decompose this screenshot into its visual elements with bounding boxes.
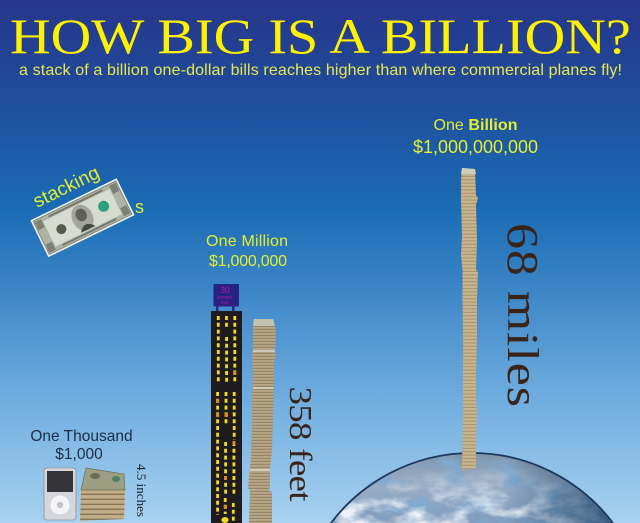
label: one billion: One Billion xyxy=(434,117,518,134)
building sign xyxy=(214,284,239,312)
label: one million: One Million xyxy=(206,233,288,250)
building sign: INN xyxy=(221,300,229,305)
icon: small cash stack xyxy=(80,468,125,521)
label: one million xyxy=(206,233,288,270)
label: one billion: $1,000,000,000 xyxy=(413,137,538,157)
heading: stacking dollar bills xyxy=(30,162,144,257)
label: 358 feet: 358 feet xyxy=(283,386,317,502)
building sign: 30 xyxy=(221,286,230,295)
label: one thousand xyxy=(30,428,133,463)
label: 68 miles: 68 miles xyxy=(498,223,546,407)
label: one thousand: One Thousand xyxy=(30,428,133,445)
icon: one-dollar bill xyxy=(30,178,135,257)
subtitle: a stack of a billion one-dollar bills reaches higher than where commercial planes fly! xyxy=(19,62,622,79)
icon: earth globe xyxy=(331,453,613,523)
label: one billion xyxy=(413,117,538,157)
icon: 30 story inn building xyxy=(211,284,242,523)
label: 4.5 inches: 4.5 inches xyxy=(134,464,149,517)
label: one thousand: $1,000 xyxy=(55,446,103,463)
icon: million-dollar cash stack xyxy=(248,319,276,523)
building sign: STORY xyxy=(217,295,233,300)
title: HOW BIG IS A BILLION? xyxy=(10,10,631,64)
icon: ipod xyxy=(44,468,76,520)
label: trailing s: s xyxy=(135,197,144,217)
label: one million: $1,000,000 xyxy=(209,253,287,270)
label: stacking: stacking xyxy=(30,162,103,212)
icon: billion-dollar cash stack xyxy=(461,168,478,470)
